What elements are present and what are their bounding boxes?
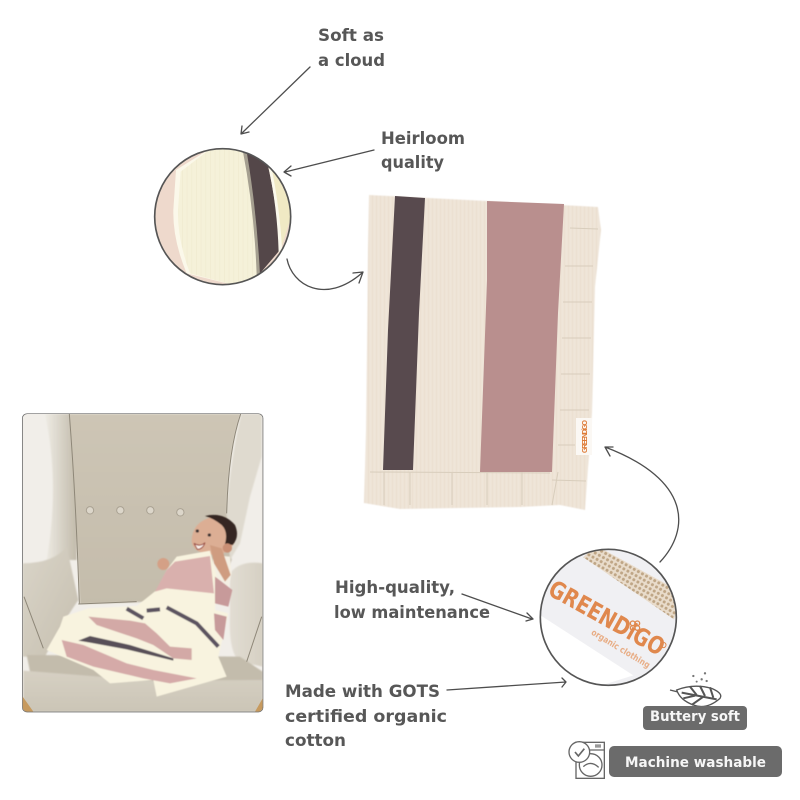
registered mark (661, 642, 666, 648)
callout: soft as a cloud (318, 26, 385, 70)
arrow: high-quality to tag swatch (462, 594, 533, 621)
callout: heirloom quality: Heirloom (381, 129, 465, 148)
blanket body (364, 195, 601, 510)
right wing (227, 414, 262, 560)
badge: machine washable (609, 746, 782, 777)
callout: soft as a cloud: Soft as (318, 26, 384, 45)
swatch circle: knit close-up (153, 147, 293, 287)
callout: made with GOTS (285, 682, 447, 750)
callout: high-quality low maintenance: low maintenance (334, 603, 490, 622)
arrow: heirloom quality to swatch (284, 150, 374, 176)
icon: feather (670, 672, 721, 706)
chair back (69, 414, 241, 604)
callout: made with GOTS: cotton (285, 731, 346, 750)
clover mark (630, 621, 640, 630)
arrow: swatch to blanket (287, 259, 363, 289)
pink stripe (480, 201, 564, 472)
tan knit (583, 550, 676, 620)
baby (157, 514, 238, 582)
callout: soft as a cloud: a cloud (318, 51, 385, 70)
lifestyle photo: baby on armchair (22, 413, 263, 712)
tufted buttons (86, 507, 184, 516)
callout: high-quality low maintenance (334, 578, 490, 622)
sewn label: GREENDiGO (582, 419, 589, 453)
icon: washing machine (569, 742, 604, 778)
arrow: GOTS to tag swatch (447, 678, 566, 690)
folded blanket (364, 195, 601, 510)
callout: heirloom quality (381, 129, 465, 172)
badge: buttery soft: Buttery soft (650, 709, 740, 725)
arrow: soft as a cloud to swatch (241, 67, 310, 134)
swatch circle: greendigo label (540, 548, 678, 686)
callout: high-quality low maintenance: High-quality, (335, 578, 455, 597)
badge: buttery soft (643, 706, 747, 730)
right armrest (230, 563, 263, 667)
border ticks (370, 228, 598, 505)
arrow: tag swatch to label (605, 447, 679, 562)
chair body (23, 414, 263, 712)
brand name: GREENDiGO (544, 575, 670, 661)
left armrest (23, 547, 78, 657)
seat (27, 655, 263, 683)
tagline: organic clothing (589, 628, 651, 671)
brick wall (23, 414, 263, 712)
draped blanket (47, 551, 232, 697)
chair legs (23, 697, 263, 712)
callout: made with GOTS: Made with GOTS (285, 682, 440, 701)
callout: heirloom quality: quality (381, 153, 444, 172)
callout: made with GOTS: certified organic (285, 707, 447, 726)
left wing (45, 414, 77, 560)
dark stripe (383, 196, 425, 470)
badge: machine washable: Machine washable (625, 755, 766, 771)
lower white (541, 616, 633, 684)
chair seam (24, 414, 262, 662)
sewn label (576, 418, 592, 455)
